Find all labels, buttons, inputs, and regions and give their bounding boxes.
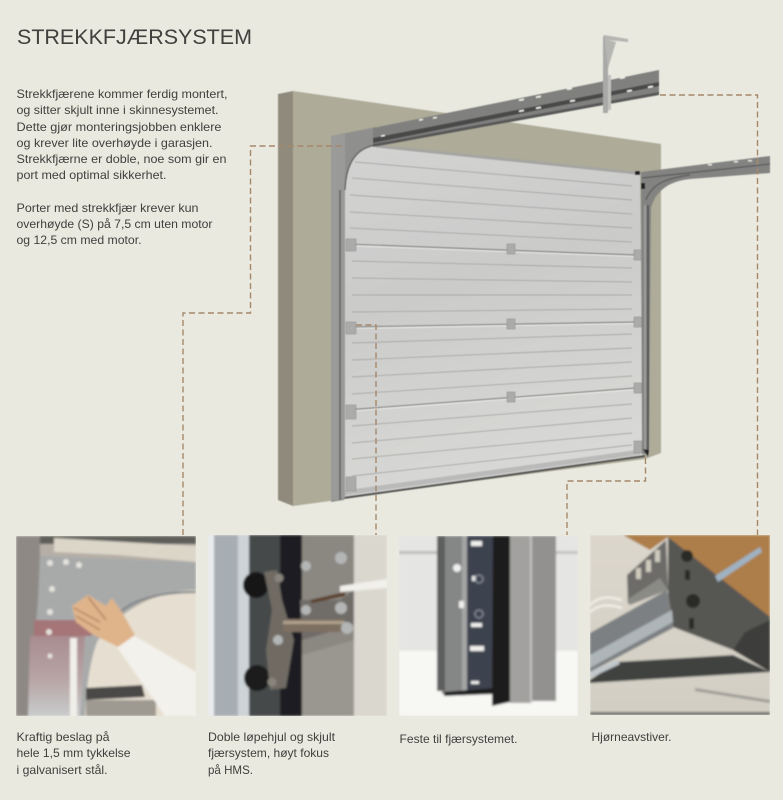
text block: intro <box>16 88 227 247</box>
leader: spring attachment <box>567 458 646 535</box>
text block: intro: Strekkfjærene kommer ferdig montert, <box>16 88 227 101</box>
caption: heavy bracket: hele 1,5 mm tykkelse <box>16 747 130 760</box>
caption: double rollers: på HMS. <box>208 764 253 777</box>
caption: heavy bracket: Kraftig beslag på <box>16 731 110 744</box>
wall: front face <box>293 91 661 506</box>
title: STREKKFJÆRSYSTEM <box>17 25 252 49</box>
photo: corner brace <box>590 535 770 715</box>
leader: corner brace <box>660 95 758 535</box>
photo: heavy bracket <box>16 536 196 716</box>
text block: intro: og krever lite overhøyde i garasjen. <box>16 137 212 150</box>
caption: corner brace: Hjørneavstiver. <box>592 731 672 744</box>
caption: double rollers: Doble løpehjul og skjult <box>208 731 336 744</box>
text block: intro: og 12,5 cm med motor. <box>16 234 142 247</box>
hinges <box>346 239 642 491</box>
text block: intro: port med optimal sikkerhet. <box>16 169 166 182</box>
text block: intro: overhøyde (S) på 7,5 cm uten motor <box>16 218 213 231</box>
text block: intro: Porter med strekkfjær krever kun <box>16 202 198 215</box>
garage door illustration <box>278 35 770 506</box>
wall: side face <box>278 91 293 506</box>
caption: heavy bracket: i galvanisert stål. <box>16 764 108 777</box>
caption: double rollers <box>208 731 336 777</box>
photo: double rollers <box>208 535 387 716</box>
leader: double rollers <box>356 325 376 535</box>
caption: spring attachment: Feste til fjærsystemet. <box>400 733 518 746</box>
right frame rail and side track <box>635 156 770 457</box>
text block: intro: og sitter skjult inne i skinnesystemet. <box>16 104 218 117</box>
ceiling bracket <box>603 35 628 113</box>
caption: heavy bracket <box>16 731 130 777</box>
leader: heavy bracket <box>183 146 345 535</box>
ceiling track <box>373 70 659 147</box>
left frame rail <box>331 127 376 502</box>
text block: intro: Dette gjør monteringsjobben enklere <box>16 121 221 134</box>
text block: intro: Strekkfjærne er doble, noe som gir en <box>16 153 226 166</box>
dashed leader lines <box>183 95 758 535</box>
caption: double rollers: fjærsystem, høyt fokus <box>208 747 329 760</box>
photo: spring attachment <box>399 536 578 716</box>
door panel <box>343 145 645 498</box>
